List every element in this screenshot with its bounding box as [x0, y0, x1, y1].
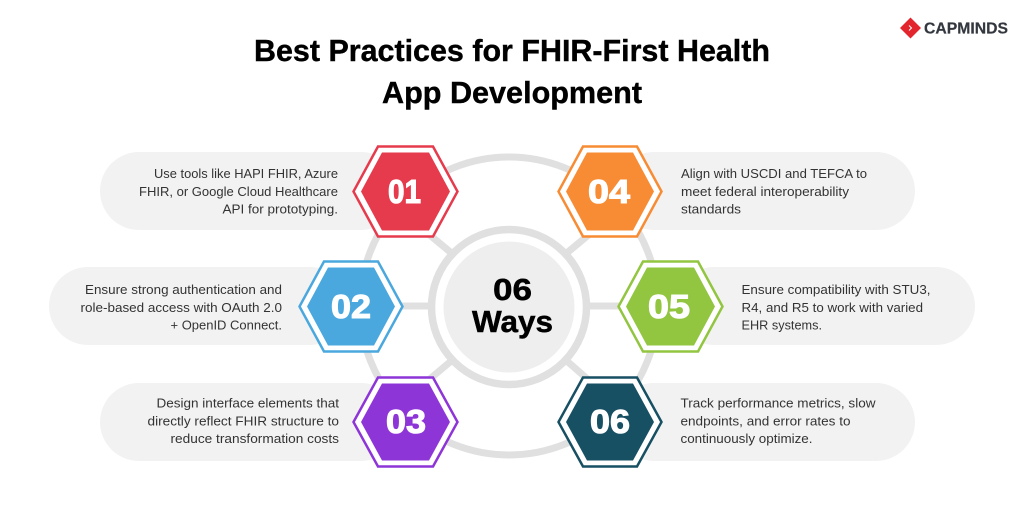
text block 2: + OpenID Connect.: [170, 318, 282, 332]
text block 5: [742, 282, 930, 332]
hexagon 06: 06: [590, 403, 630, 440]
text block 6: [680, 396, 876, 446]
text block 3: directly reflect FHIR structure to: [148, 414, 339, 428]
hexagon 03: [354, 378, 458, 466]
logo: Capminds: CAPMINDS: [924, 20, 1008, 38]
text block 3: Design interface elements that: [156, 396, 339, 410]
hexagon 05: [618, 262, 722, 352]
text block 6: Track performance metrics, slow: [680, 396, 876, 410]
center circle: 06 Ways: Ways: [472, 304, 553, 339]
hexagon 02: 02: [331, 288, 371, 325]
text block 3: reduce transformation costs: [170, 431, 340, 446]
text block 4: [681, 166, 867, 216]
text block 4: meet federal interoperability: [681, 184, 850, 199]
text block 3: [148, 396, 340, 446]
title: App Development: [382, 76, 642, 110]
outer ring and spokes: [360, 157, 658, 455]
text pill 1 background: [100, 152, 400, 230]
title: Best Practices for FHIR-First Health: [254, 34, 770, 68]
text block 2: Ensure strong authentication and: [85, 282, 282, 297]
text pill 4 background: [615, 152, 915, 230]
hexagon 01: [354, 146, 458, 236]
text block 2: role-based access with OAuth 2.0: [80, 300, 282, 315]
text block 1: Use tools like HAPI FHIR, Azure: [154, 166, 338, 181]
hexagon 06: [558, 378, 662, 466]
text block 6: endpoints, and error rates to: [680, 414, 850, 428]
hexagon 01: 01: [388, 173, 421, 210]
text pill 5 background: [675, 267, 975, 345]
text block 4: standards: [681, 202, 742, 216]
text block 2: [80, 282, 282, 332]
text pill 3 background: [100, 383, 400, 461]
text block 1: FHIR, or Google Cloud Healthcare: [139, 184, 338, 199]
text block 5: R4, and R5 to work with varied: [742, 300, 923, 315]
text block 4: Align with USCDI and TEFCA to: [681, 166, 867, 181]
center circle: 06 Ways: 06: [493, 272, 532, 307]
text block 1: [139, 166, 338, 216]
hexagon 03: 03: [386, 403, 426, 440]
text block 5: Ensure compatibility with STU3,: [742, 282, 930, 297]
hexagon 04: 04: [588, 173, 631, 210]
hexagon 02: [300, 262, 402, 352]
text block 6: continuously optimize.: [680, 431, 812, 446]
hexagon 04: [558, 146, 662, 236]
text pill 2 background: [49, 267, 349, 345]
center circle: 06 Ways: [432, 230, 586, 384]
text block 1: API for prototyping.: [222, 202, 338, 216]
hexagon 05: 05: [648, 288, 690, 325]
logo: Capminds: [900, 18, 1008, 38]
text pill 6 background: [615, 383, 915, 461]
title: [254, 34, 770, 110]
text block 5: EHR systems.: [742, 318, 822, 332]
